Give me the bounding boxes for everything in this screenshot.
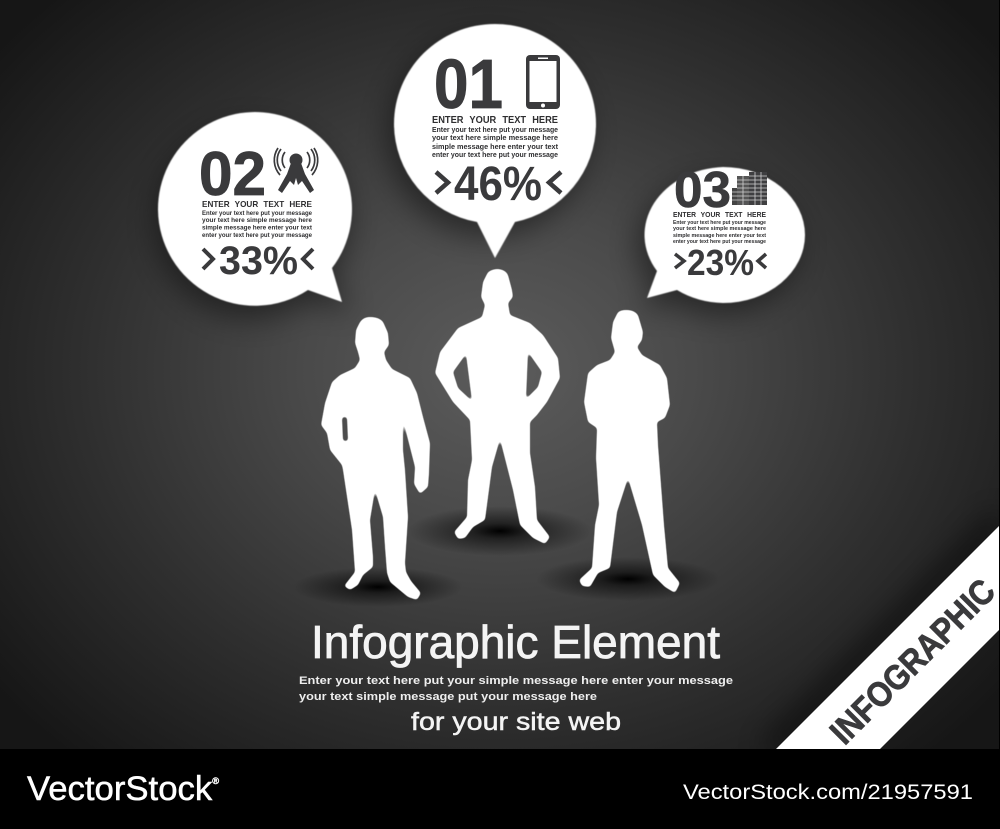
text block: your text here simple message here: [432, 133, 558, 142]
text block: simple message here enter your text: [202, 224, 313, 232]
text block: enter your text here put your message: [673, 239, 766, 245]
message text: [299, 675, 733, 703]
text block: simple message here enter your text: [673, 233, 766, 239]
number 03: 03: [674, 161, 731, 218]
figure: centre man: [435, 269, 560, 544]
bubble 02: [158, 112, 352, 306]
text block: ENTER YOUR TEXT HERE: [202, 199, 312, 209]
percentage 23%: 23%: [687, 242, 754, 283]
bubble shape: [394, 24, 596, 258]
watermark url: VectorStock.com/21957591: [683, 781, 973, 804]
bubble shape: [158, 112, 352, 306]
title: Infographic Element: [311, 616, 720, 668]
percentage 46%: 46%: [454, 158, 542, 211]
text block: your text here simple message here: [673, 226, 766, 232]
text block: ENTER YOUR TEXT HERE: [432, 114, 558, 126]
bottom watermark bar: [0, 749, 1000, 829]
text block: enter your text here put your message: [432, 150, 558, 159]
text block: your text here simple message here: [202, 217, 312, 224]
figure: left man: [321, 317, 430, 600]
number 01: 01: [434, 45, 503, 123]
text block: simple message here enter your text: [432, 142, 558, 151]
text block: [673, 212, 766, 245]
corner ribbon: [776, 526, 1000, 752]
message text: your text simple message put your message here: [299, 691, 597, 703]
floor shadows: [293, 506, 720, 607]
bubble shape: [645, 167, 805, 303]
chevrons: [436, 172, 561, 193]
icon: buildings: [732, 172, 767, 205]
text block: Enter your text here put your message: [202, 210, 312, 217]
chevrons: [203, 249, 313, 269]
number 02: 02: [199, 140, 266, 209]
watermark logo: VectorStock: [27, 770, 208, 808]
figure: right man: [579, 310, 680, 593]
text block: ENTER YOUR TEXT HERE: [673, 212, 766, 219]
corner ribbon shadow: [760, 510, 999, 749]
bubble 03: [645, 161, 805, 303]
text block: [202, 199, 313, 239]
bubble shadows: [155, 35, 799, 319]
text block: Enter your text here put your message: [673, 220, 766, 226]
chevrons: [675, 254, 766, 268]
silhouettes of three men: [321, 269, 680, 600]
icon: smartphone: [526, 55, 560, 109]
message text: Enter your text here put your simple message here enter your message: [299, 675, 733, 687]
text block: Enter your text here put your message: [432, 125, 558, 134]
watermark logo: ®: [212, 776, 219, 786]
tagline: for your site web: [411, 708, 621, 736]
icon: radio tower: [274, 148, 318, 193]
percentage 33%: 33%: [219, 239, 298, 283]
bubble 01: [394, 24, 596, 258]
text block: [432, 114, 558, 159]
text block: enter your text here put your message: [202, 232, 312, 239]
